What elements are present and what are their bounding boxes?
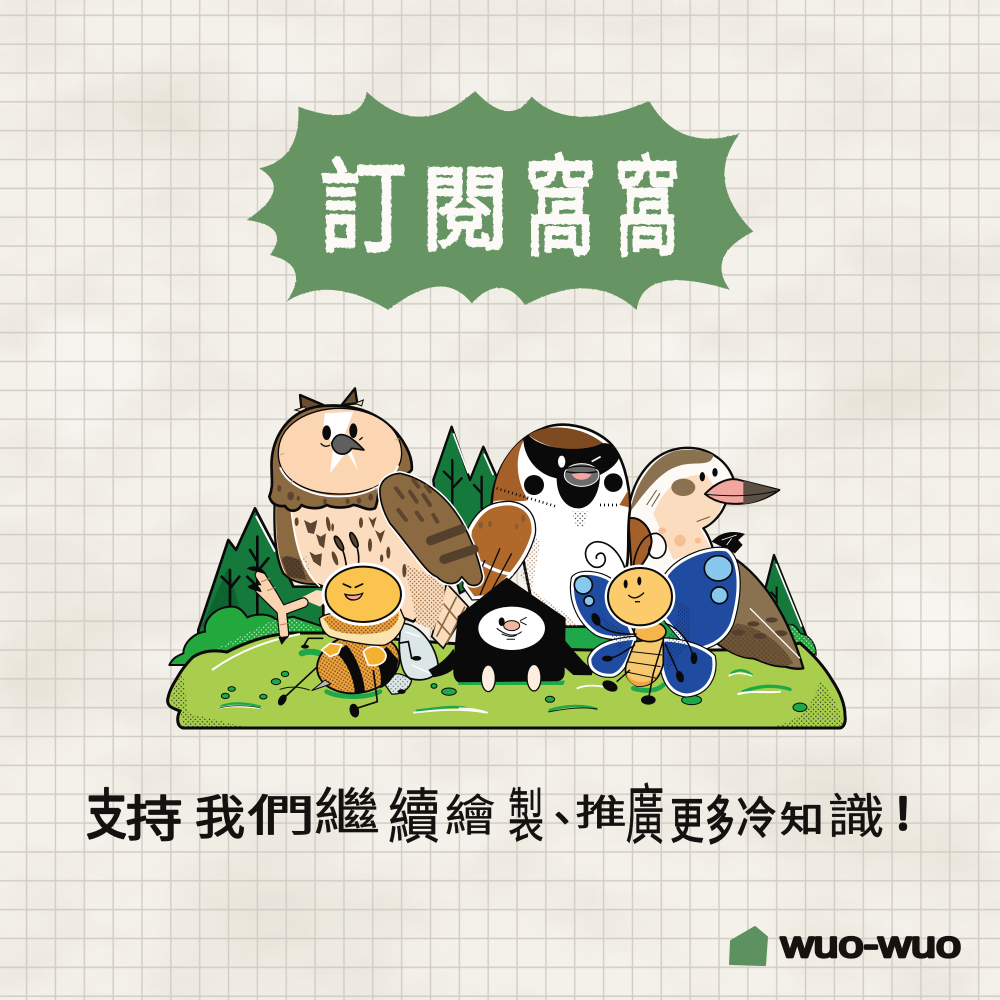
right tree	[765, 555, 816, 655]
caption: 知	[780, 801, 824, 840]
owl ear tufts	[300, 388, 357, 411]
owl lower dotted feathers	[403, 563, 445, 630]
sparrow black mask	[523, 437, 620, 508]
caption: 持	[126, 793, 182, 847]
back trees	[433, 427, 503, 593]
butterfly wing spots	[574, 556, 732, 606]
butterfly antennae	[586, 533, 666, 568]
kookaburra body	[628, 448, 733, 580]
bee wings	[382, 674, 412, 694]
caption: 繼	[314, 783, 380, 841]
title: 訂	[320, 153, 406, 267]
owl head	[269, 406, 412, 511]
title	[320, 149, 679, 270]
caption: 更	[670, 794, 704, 848]
owl wing	[380, 473, 482, 585]
left bush	[169, 607, 323, 665]
left trees	[198, 508, 323, 637]
bee	[276, 532, 438, 719]
butterfly legs	[597, 620, 693, 700]
owl back feathers	[276, 493, 315, 583]
sparrow beak	[564, 464, 599, 486]
sparrow body	[492, 425, 630, 627]
butterfly head	[607, 567, 673, 627]
owl	[247, 388, 482, 648]
owl talons	[247, 566, 288, 645]
bee sting	[312, 680, 331, 691]
title: 窩	[524, 149, 596, 270]
kookaburra beak	[705, 479, 779, 504]
kookaburra tail feathers	[712, 532, 745, 553]
owl tail	[432, 583, 468, 648]
owl foot	[300, 590, 335, 607]
logo: house icon	[730, 927, 767, 965]
title: 閱	[422, 159, 508, 262]
mole	[429, 578, 593, 692]
bee legs	[280, 638, 420, 708]
title: 窩	[615, 149, 679, 270]
hill highlight	[212, 634, 300, 670]
logo	[730, 924, 961, 965]
owl body	[274, 493, 443, 622]
logo: wordmark: wuo-wuo	[780, 924, 961, 965]
butterfly	[573, 533, 738, 705]
owl face	[278, 408, 402, 494]
tree sparrow	[463, 425, 652, 627]
caption: ！	[882, 791, 924, 838]
mole face	[478, 607, 545, 650]
illustration: animals on a grassy hill	[168, 388, 845, 728]
bee collar	[319, 608, 405, 645]
bee body	[311, 626, 405, 701]
kookaburra wing	[717, 560, 803, 669]
mole body	[429, 578, 565, 682]
butterfly upper wings	[573, 549, 738, 649]
bee head	[324, 565, 403, 624]
caption: 製	[508, 785, 544, 850]
hill spots	[221, 671, 456, 699]
butterfly lower wings	[590, 638, 714, 695]
right bush	[788, 625, 816, 655]
bee antennae	[335, 533, 359, 568]
butterfly body	[625, 638, 663, 686]
owl beak	[332, 435, 364, 454]
owl breast marks	[295, 516, 406, 577]
caption: 們	[247, 792, 315, 841]
caption: 繪	[445, 791, 495, 840]
caption	[86, 781, 924, 853]
caption: 我	[195, 793, 245, 845]
hill	[430, 620, 690, 660]
heading badge: spiky green burst with title	[247, 91, 753, 310]
spiky green badge	[247, 91, 753, 310]
sparrow near wing	[465, 503, 534, 598]
hill squiggles	[218, 652, 487, 713]
caption: 推	[575, 793, 627, 833]
caption: 多	[706, 792, 734, 850]
kookaburra	[628, 448, 803, 669]
mole feet	[481, 665, 495, 692]
caption: 支	[86, 785, 127, 847]
sparrow far wing	[628, 518, 652, 571]
caption: 識	[827, 790, 885, 844]
caption: 、	[542, 798, 582, 842]
caption: 冷	[736, 794, 776, 843]
caption: 廣	[626, 781, 664, 853]
bee flowers	[322, 643, 342, 657]
caption: 續	[388, 784, 440, 851]
